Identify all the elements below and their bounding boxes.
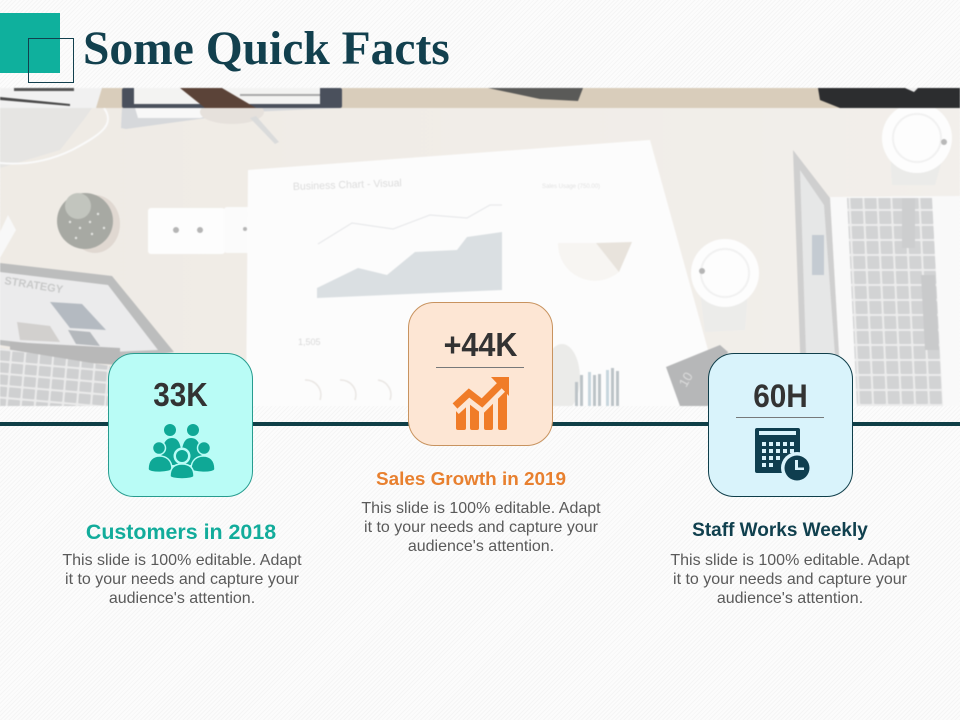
gauges xyxy=(305,380,391,400)
unfaded photo strip at the top xyxy=(0,88,960,108)
value +44K: +44K xyxy=(444,326,517,363)
text: sales growth: it to your needs and capture your xyxy=(364,519,598,536)
text: customers: This slide is 100% editable. Adapt xyxy=(62,552,302,569)
text: staff hours: audience's attention. xyxy=(717,590,863,607)
pen on the left xyxy=(0,215,16,258)
value 33K: 33K xyxy=(153,376,208,413)
small bar chart xyxy=(575,368,619,406)
left laptop: STRATEGY xyxy=(4,275,64,296)
card: sales growth xyxy=(408,302,553,446)
title: Some Quick Facts xyxy=(83,23,450,75)
text: customers xyxy=(62,552,302,607)
card: customers xyxy=(108,353,253,497)
heading: customers: Customers in 2018 xyxy=(86,520,276,544)
phone: 10 xyxy=(676,369,696,390)
top left laptop, faded xyxy=(0,108,108,168)
value 60H: 60H xyxy=(753,378,808,414)
heading: staff hours: Staff Works Weekly xyxy=(692,520,868,541)
text: customers: it to your needs and capture your xyxy=(65,571,299,588)
text: staff hours: This slide is 100% editable. Adapt xyxy=(670,552,910,569)
icon: people group xyxy=(148,424,214,478)
divider xyxy=(436,367,524,368)
wall sockets xyxy=(148,207,254,254)
left laptop xyxy=(0,263,174,406)
card: staff hours xyxy=(708,353,853,497)
text: customers: audience's attention. xyxy=(109,590,255,607)
report title: Business Chart - Visual xyxy=(293,177,402,193)
area chart xyxy=(317,205,502,298)
text: sales growth: audience's attention. xyxy=(408,538,554,555)
small stat: 1,505 xyxy=(298,337,321,347)
text: staff hours xyxy=(670,552,910,607)
hand shadow xyxy=(544,344,580,412)
cactus pot xyxy=(57,193,120,253)
text: sales growth xyxy=(361,500,601,555)
coffee cup large xyxy=(882,103,952,185)
text: sales growth: This slide is 100% editable. Adapt xyxy=(361,500,601,517)
heading: sales growth: Sales Growth in 2019 xyxy=(376,469,566,490)
printed report paper xyxy=(246,140,708,412)
background photo: office desk xyxy=(0,87,960,406)
timeline bar xyxy=(0,422,960,426)
pie chart: Sales Usage (750.00) xyxy=(542,184,600,190)
decorative title mark xyxy=(0,13,74,83)
icon: growth chart xyxy=(452,377,509,430)
tablet, faded xyxy=(121,100,340,144)
text: staff hours: it to your needs and capture your xyxy=(673,571,907,588)
icon: calendar with clock xyxy=(755,428,810,480)
coffee cup small xyxy=(691,239,759,332)
divider xyxy=(736,417,824,418)
pie chart xyxy=(542,184,632,281)
right laptop xyxy=(793,150,960,406)
phone xyxy=(666,345,728,406)
